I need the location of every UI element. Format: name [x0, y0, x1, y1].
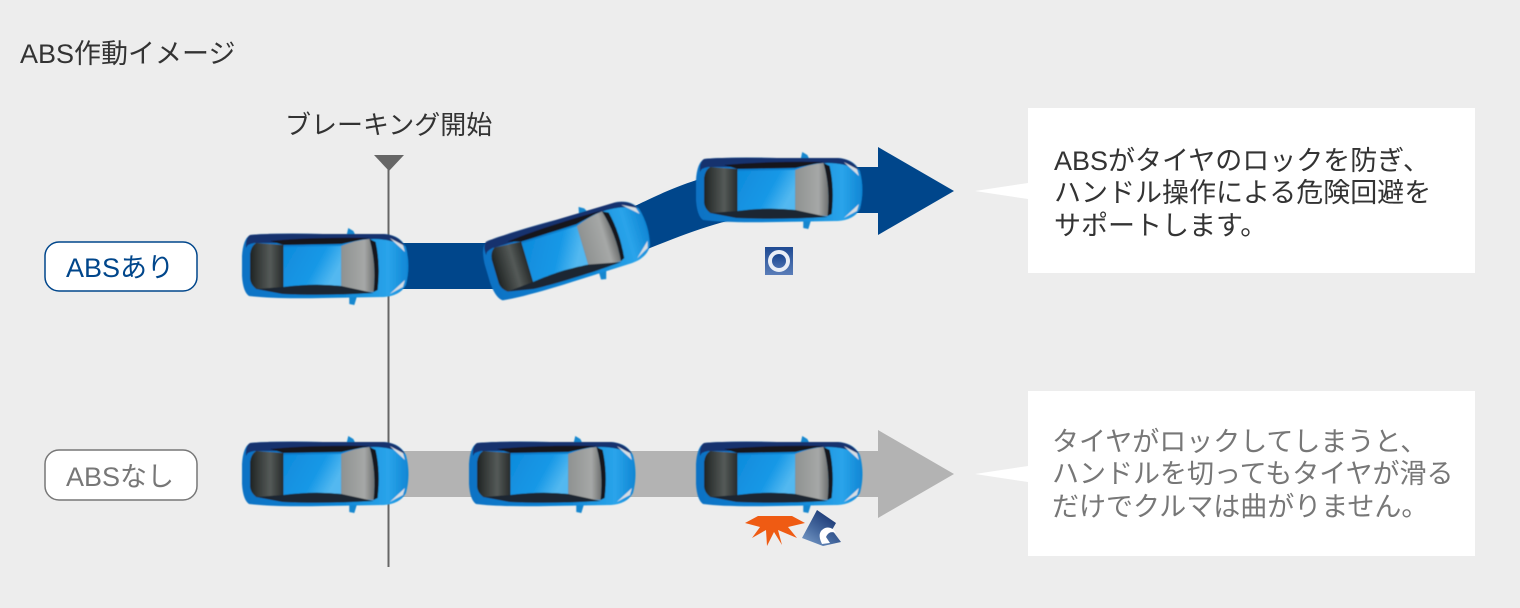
row: with ABS [45, 147, 954, 311]
car: end [696, 436, 862, 513]
icon: locked tire [802, 510, 841, 546]
icon: marker triangle [374, 155, 404, 171]
icon: orange skid spark [745, 516, 805, 546]
label: ABS off: ABSなし [66, 462, 174, 492]
callout text: ハンドル操作による危険回避を [1054, 178, 1431, 208]
braking start line [388, 165, 390, 567]
row: without ABS [45, 430, 954, 546]
callout: with ABS [975, 108, 1475, 273]
icon: circle badge [765, 247, 793, 275]
braking start marker [285, 110, 492, 567]
callout text: サポートします。 [1054, 211, 1267, 241]
title: ABS作動イメージ [20, 39, 236, 69]
label: ABS off [45, 450, 197, 500]
callout text: だけでクルマは曲がりません。 [1052, 492, 1428, 522]
car: start [242, 228, 408, 305]
arrow: straight grey path [400, 430, 954, 518]
car: after steering [696, 152, 862, 229]
label: ABS on: ABSあり [66, 253, 174, 283]
car: steering [477, 190, 658, 311]
arrow: curved blue path [400, 147, 954, 289]
braking start label: ブレーキング開始 [285, 110, 492, 140]
car: start [242, 436, 408, 513]
car: middle [469, 436, 635, 513]
callout text: ハンドルを切ってもタイヤが滑る [1052, 459, 1454, 489]
callout: without ABS [975, 391, 1475, 556]
label: ABS on [45, 242, 197, 291]
callout text: タイヤがロックしてしまうと、 [1052, 427, 1427, 457]
callout text: ABSがタイヤのロックを防ぎ、 [1054, 146, 1430, 176]
